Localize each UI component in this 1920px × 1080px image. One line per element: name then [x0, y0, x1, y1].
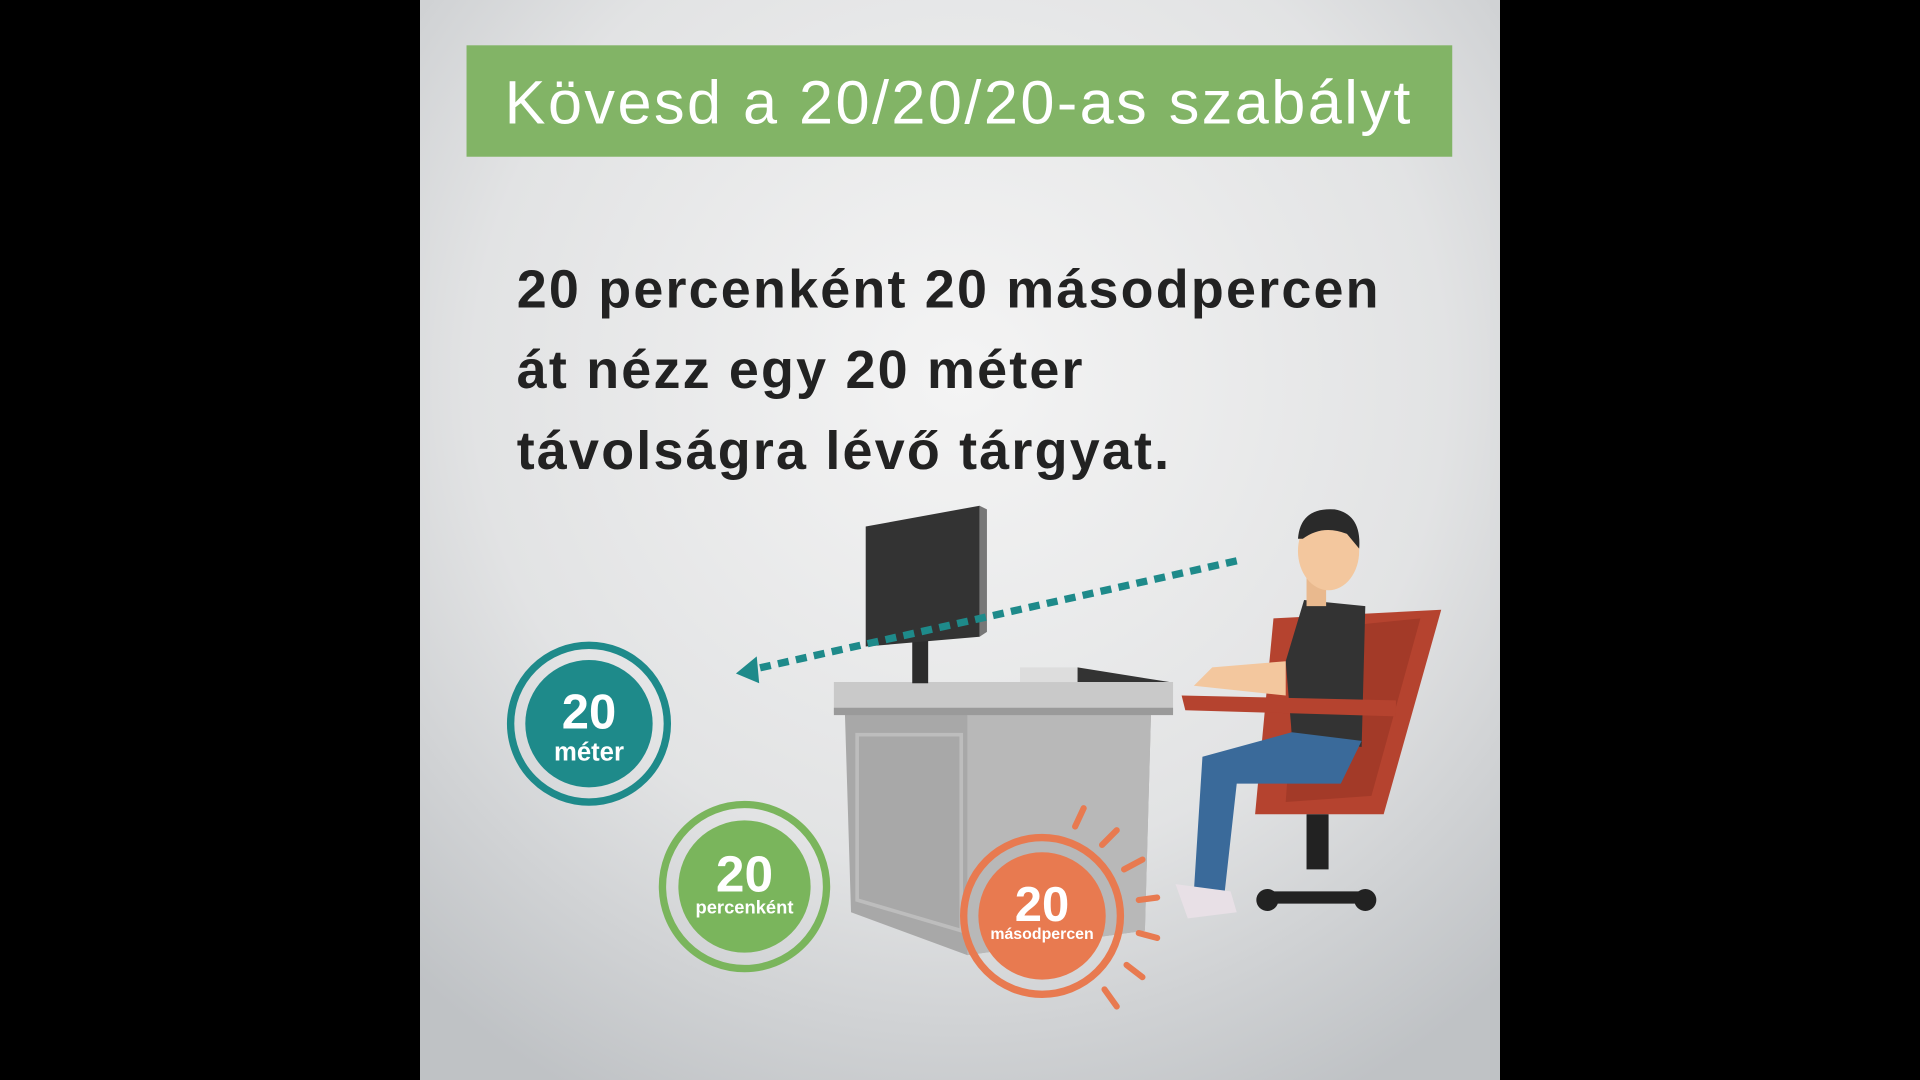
- title banner: Kövesd a 20/20/20-as szabályt: [505, 69, 1413, 137]
- text block: rule description: távolságra lévő tárgyat.: [517, 421, 1171, 481]
- badge: 20 méter: 20: [562, 686, 616, 740]
- keyboard: [1020, 667, 1169, 682]
- title banner: [467, 45, 1452, 157]
- arrow: line of sight: [736, 561, 1237, 683]
- badge: 20 percenként: [662, 804, 827, 969]
- badge: 20 másodpercen: másodpercen: [990, 926, 1094, 943]
- badge: 20 másodpercen: 20: [1015, 878, 1069, 932]
- monitor: [866, 506, 987, 683]
- panel: background: [420, 0, 1500, 1080]
- badge: 20 percenként: percenként: [696, 896, 793, 917]
- person in chair: [1176, 509, 1441, 918]
- badge: 20 másodpercen: [964, 808, 1157, 1007]
- text block: rule description: át nézz egy 20 méter: [517, 340, 1085, 400]
- badge: 20 méter: [511, 645, 667, 802]
- text block: rule description: [517, 259, 1381, 481]
- badge: 20 percenként: 20: [716, 844, 773, 902]
- badge: 20 méter: méter: [554, 738, 624, 766]
- text block: rule description: 20 percenként 20 másodpercen: [517, 259, 1381, 319]
- desk: [834, 682, 1173, 955]
